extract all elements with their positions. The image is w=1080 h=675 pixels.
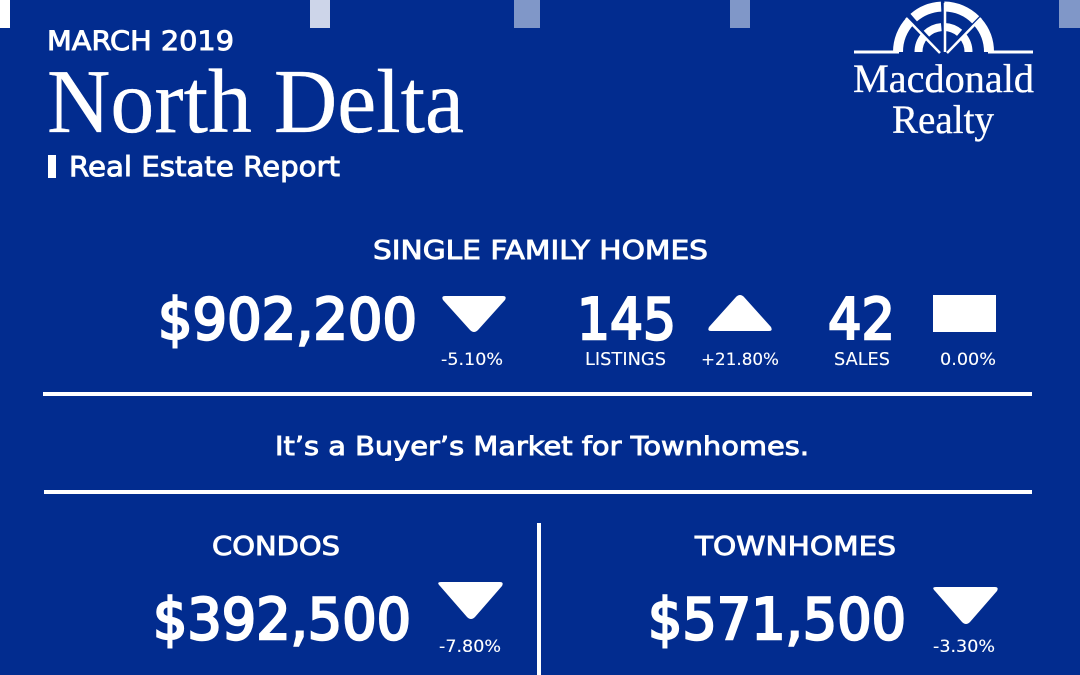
panel: townhomes: -3.30% bbox=[933, 637, 995, 657]
stat: single family price: -5.10% bbox=[441, 350, 503, 370]
panel: condos: -7.80% bbox=[439, 637, 501, 657]
logo: Macdonald Realty: Macdonald bbox=[853, 56, 1034, 101]
stat: single family price: $902,200 bbox=[158, 287, 417, 353]
stat: sales bbox=[828, 287, 996, 370]
icon: down triangle bbox=[442, 296, 506, 332]
stat: sales: 0.00% bbox=[940, 350, 996, 370]
stat: sales: SALES bbox=[834, 349, 890, 370]
panel: condos bbox=[153, 532, 503, 657]
icon: up triangle bbox=[708, 295, 772, 331]
section heading: single family homes: SINGLE FAMILY HOMES bbox=[373, 236, 708, 266]
panel: condos: $392,500 bbox=[153, 587, 411, 653]
market statement: It’s a Buyer’s Market for Townhomes. bbox=[275, 432, 809, 462]
logo: Macdonald Realty: Realty bbox=[892, 97, 994, 142]
panel: townhomes: TOWNHOMES bbox=[694, 532, 896, 562]
stat: sales: 42 bbox=[828, 287, 895, 353]
stat: single family price bbox=[158, 287, 506, 370]
icon: no-change rectangle bbox=[933, 295, 996, 332]
panel: townhomes bbox=[648, 532, 998, 657]
panel: townhomes: $571,500 bbox=[648, 587, 906, 653]
stat: listings bbox=[577, 287, 779, 370]
stat: listings: 145 bbox=[577, 287, 676, 353]
subtitle with bar: Real Estate Report bbox=[69, 150, 340, 183]
title: North Delta bbox=[47, 51, 464, 152]
panel: condos: CONDOS bbox=[212, 532, 340, 562]
icon: down triangle bbox=[933, 587, 998, 624]
stat: listings: LISTINGS bbox=[585, 349, 666, 370]
icon: down triangle bbox=[438, 582, 503, 619]
date label: MARCH 2019 bbox=[47, 26, 234, 57]
stat: listings: +21.80% bbox=[701, 350, 779, 370]
top colour tabs bbox=[0, 0, 1080, 28]
logo: Macdonald Realty bbox=[853, 3, 1034, 142]
